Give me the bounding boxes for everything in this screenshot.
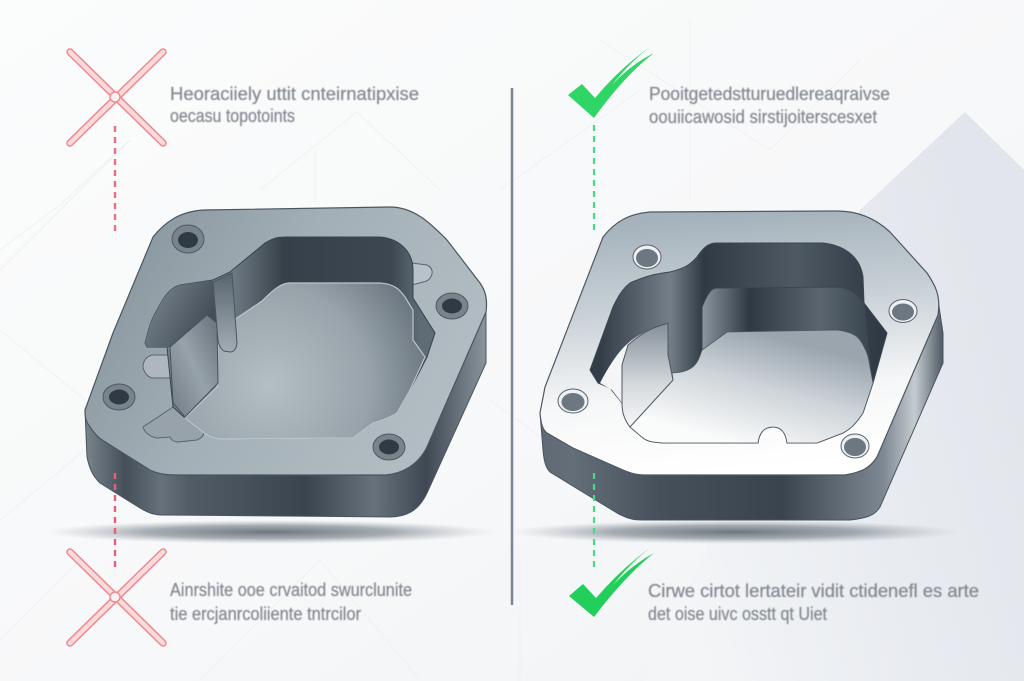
text block: bottom right xyxy=(648,581,979,624)
text block: bottom left: tie ercjanrcoliiente tntrcilor xyxy=(170,604,361,624)
cavity walls: left xyxy=(145,237,435,439)
text block: top right xyxy=(649,84,890,127)
connector: red dashed bottom xyxy=(114,473,116,570)
stepped wall: right xyxy=(702,287,870,370)
overflow pills: left xyxy=(143,263,432,442)
text block: bottom left: Ainrshite ooe crvaitod swurclunite xyxy=(170,580,412,600)
text block: bottom right: det oise uivc osstt qt Uiet xyxy=(648,604,827,624)
angled flap: left xyxy=(170,315,218,417)
part top face: right xyxy=(540,211,939,475)
left wall pocket xyxy=(145,280,218,347)
cavity floor: right xyxy=(630,330,873,443)
icon: red cross top xyxy=(70,52,163,143)
panel: right good part xyxy=(510,211,960,544)
text block: bottom right: Cirwe cirtot lertateir vidit ctidenefl es arte xyxy=(648,581,979,601)
divider xyxy=(511,88,513,605)
text block: top left xyxy=(170,84,419,126)
white gap: right xyxy=(600,323,668,427)
text block: top right: oouiicawosid sirstijoiterscesxet xyxy=(649,107,877,127)
icon: green check bottom xyxy=(569,548,654,617)
angled flap: right xyxy=(622,323,673,427)
text block: top left: Heoraciiely uttit cnteirnatipxise xyxy=(170,84,419,104)
panel: left bad part xyxy=(45,207,495,544)
ground shadow: left xyxy=(45,520,495,544)
part side wall: left xyxy=(85,307,486,517)
bolt holes: right xyxy=(558,245,917,458)
connector: green dashed bottom xyxy=(593,473,595,572)
icon: red cross bottom xyxy=(70,552,163,643)
part top face: left xyxy=(85,207,487,475)
cavity walls: right xyxy=(590,243,887,443)
text block: bottom left xyxy=(170,580,412,624)
icon: green check top xyxy=(568,47,654,118)
connector: green dashed top xyxy=(593,125,595,232)
bolt holes: left xyxy=(103,225,468,460)
connector: red dashed top xyxy=(114,126,116,232)
cavity floor: left xyxy=(185,283,425,439)
ground shadow: right xyxy=(510,520,960,544)
text block: top right: Pooitgetedstturuedlereaqraivse xyxy=(649,84,890,104)
text block: top left: oecasu topotoints xyxy=(170,106,295,126)
vertical strip: left xyxy=(213,273,237,352)
part side wall: right xyxy=(540,300,943,520)
